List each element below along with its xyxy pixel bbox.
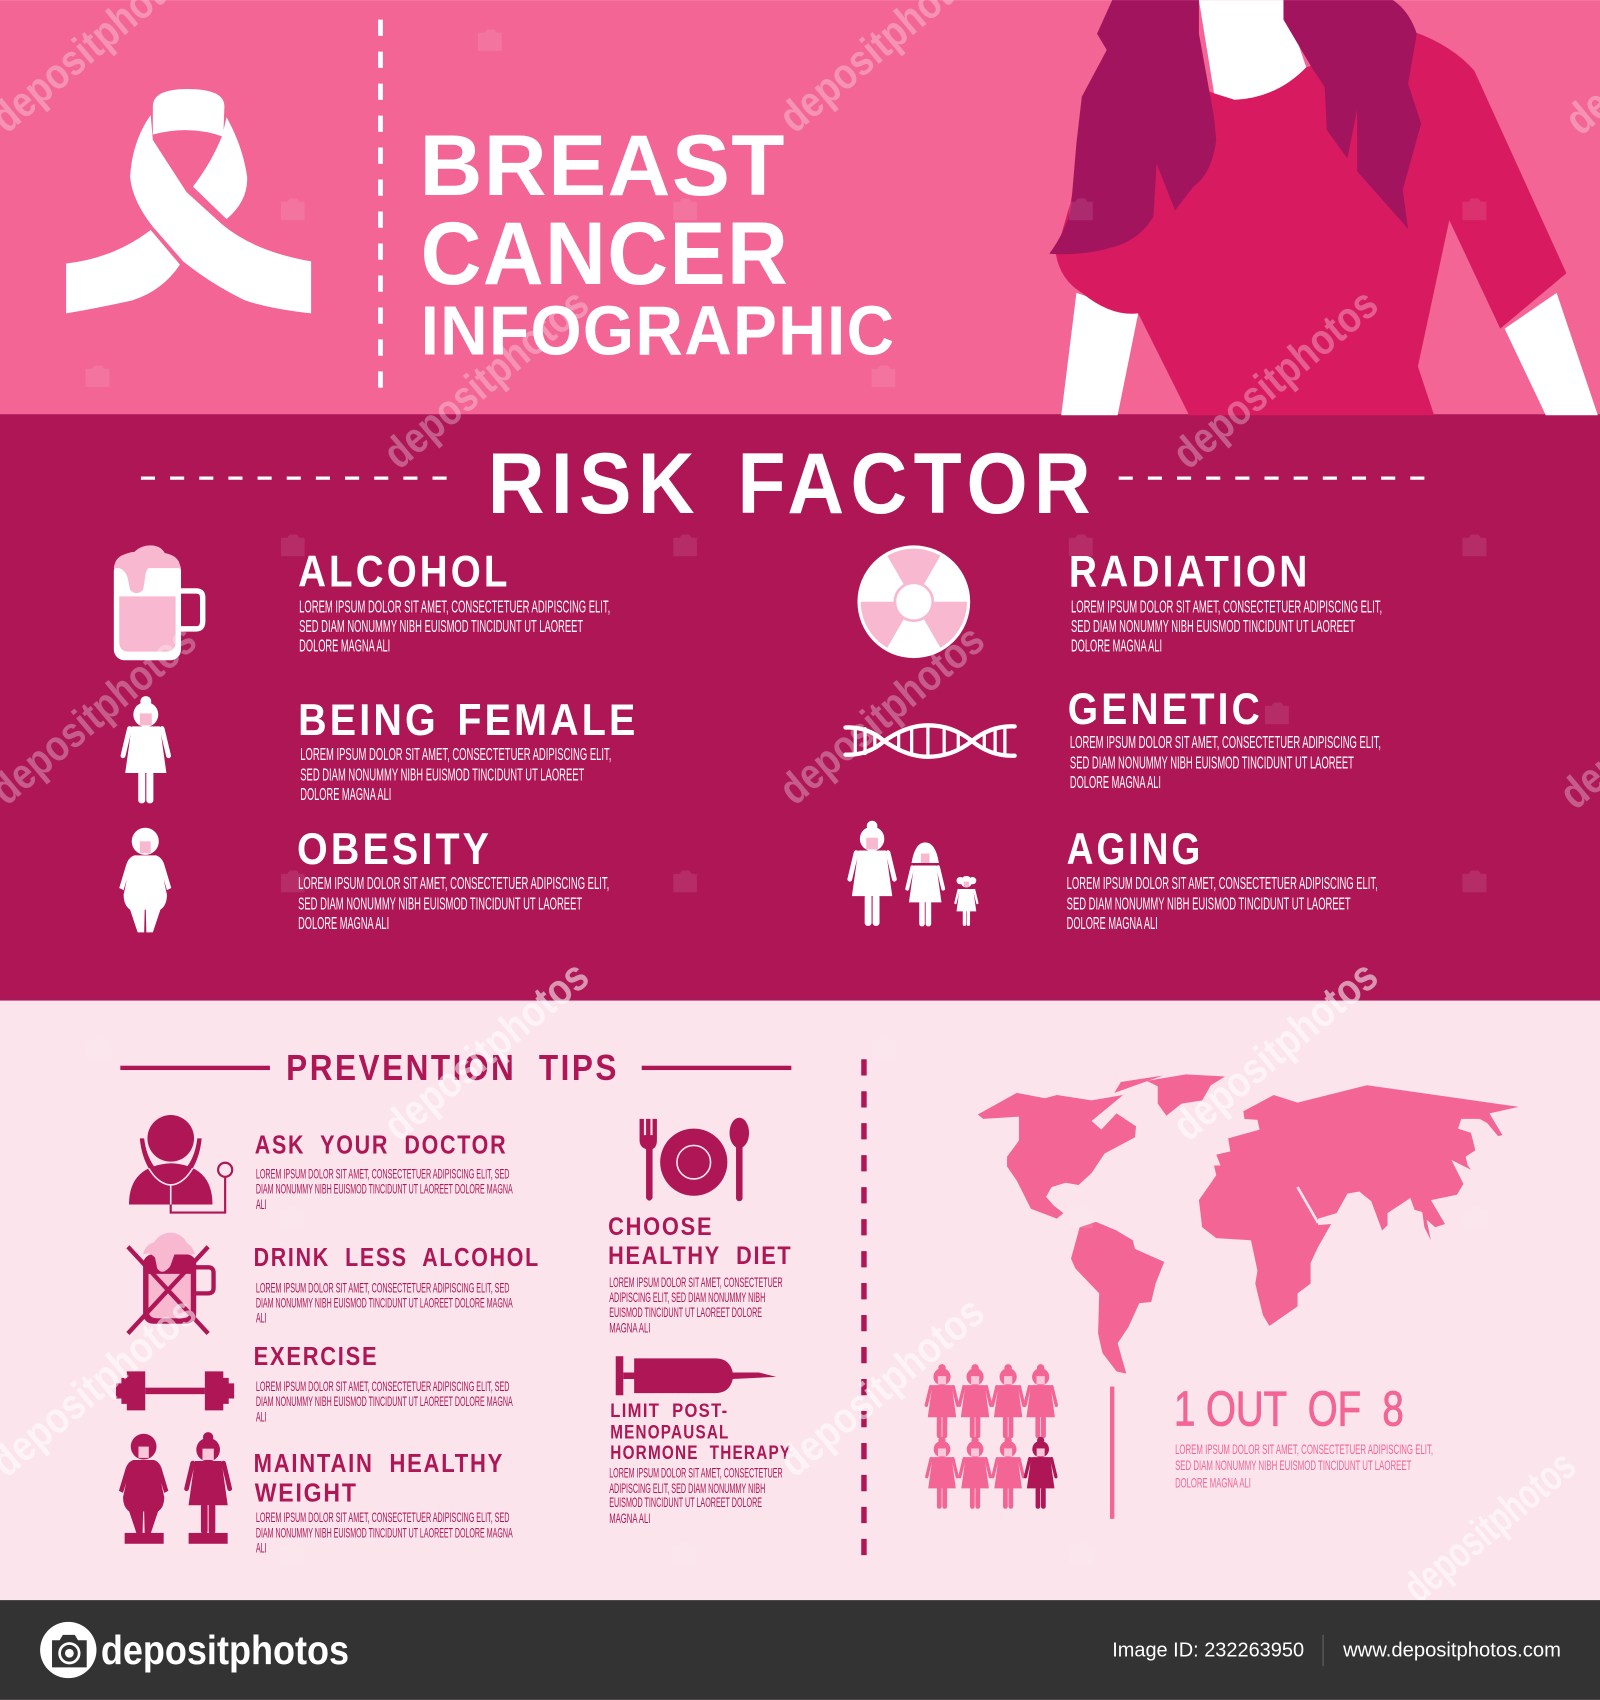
tip: drink less alcohol <box>254 1242 540 1326</box>
watermarks: light band: depositphotos <box>1164 952 1387 1150</box>
watermarks: light band: depositphotos <box>770 1288 994 1486</box>
tip: limit hormone therapy: MENOPAUSAL <box>610 1422 730 1444</box>
risk: alcohol: DOLORE MAGNA ALI <box>299 636 390 656</box>
statistic: 1 out of 8: SED DIAM NONUMMY NIBH EUISMOD TINCIDUNT UT LAOREET <box>1175 1457 1412 1473</box>
pictogram: 1 of 8 women <box>926 1364 1056 1509</box>
tip: ask your doctor: ASK YOUR DOCTOR <box>255 1130 507 1160</box>
divider: header dashed line <box>378 20 383 390</box>
watermarks: depositphotos <box>770 616 994 814</box>
footer logo: depositphotos <box>101 1627 349 1673</box>
footer credits: www.depositphotos.com <box>1342 1639 1561 1662</box>
tip: maintain healthy weight: MAINTAIN HEALTHY <box>254 1448 504 1478</box>
tip: choose healthy diet: ADIPISCING ELIT, SED DIAM NONUMMY NIBH <box>609 1289 765 1305</box>
footer credits: Image ID: 232263950 <box>1112 1639 1304 1662</box>
tip: limit hormone therapy <box>609 1400 791 1526</box>
icon: crossed-out beer mug <box>128 1233 214 1333</box>
risk: aging <box>1067 825 1378 933</box>
panel: risk factor band <box>0 414 1600 1001</box>
risk: obesity: LOREM IPSUM DOLOR SIT AMET, CONSECTETUER ADIPISCING ELIT, <box>298 873 609 893</box>
risk: aging: DOLORE MAGNA ALI <box>1067 913 1158 933</box>
tip: exercise <box>254 1341 513 1424</box>
panel: header band <box>0 0 1600 415</box>
icon: doctor <box>129 1115 232 1213</box>
risk: genetic: GENETIC <box>1068 685 1263 734</box>
icon: dna helix <box>846 725 1015 757</box>
risk: aging: SED DIAM NONUMMY NIBH EUISMOD TINCIDUNT UT LAOREET <box>1067 894 1351 914</box>
tip: limit hormone therapy: MAGNA ALI <box>609 1510 650 1526</box>
risk: obesity: SED DIAM NONUMMY NIBH EUISMOD TINCIDUNT UT LAOREET <box>298 894 582 914</box>
tip: choose healthy diet: CHOOSE <box>608 1213 713 1241</box>
risk: being female: LOREM IPSUM DOLOR SIT AMET, CONSECTETUER ADIPISCING ELIT, <box>300 744 611 764</box>
icon: obese figure <box>119 828 171 932</box>
risk: alcohol: ALCOHOL <box>298 548 511 597</box>
tip: maintain healthy weight: DIAM NONUMMY NIBH EUISMOD TINCIDUNT UT LAOREET DOLORE MAGNA <box>256 1524 513 1540</box>
tip: limit hormone therapy: ADIPISCING ELIT, SED DIAM NONUMMY NIBH <box>609 1480 765 1496</box>
icon: beer mug <box>114 545 203 660</box>
watermarks: depositphotos <box>1164 280 1387 478</box>
title: CANCER <box>421 204 789 303</box>
tip: maintain healthy weight: ALI <box>256 1539 267 1555</box>
risk: radiation <box>1069 548 1382 656</box>
tip: exercise: DIAM NONUMMY NIBH EUISMOD TINCIDUNT UT LAOREET DOLORE MAGNA <box>256 1393 513 1409</box>
tip: choose healthy diet: HEALTHY DIET <box>608 1242 792 1270</box>
tip: maintain healthy weight: WEIGHT <box>255 1477 358 1507</box>
tip: maintain healthy weight <box>254 1448 513 1555</box>
title: INFOGRAPHIC <box>421 292 895 370</box>
footer credits <box>1112 1635 1561 1666</box>
watermarks: light band <box>0 952 1585 1612</box>
tip: ask your doctor: DIAM NONUMMY NIBH EUISMOD TINCIDUNT UT LAOREET DOLORE MAGNA <box>256 1181 513 1197</box>
statistic: 1 out of 8: DOLORE MAGNA ALI <box>1175 1474 1251 1490</box>
risk: aging: AGING <box>1067 825 1203 874</box>
watermarks: camera marks <box>86 29 1486 1564</box>
risk: being female: SED DIAM NONUMMY NIBH EUISMOD TINCIDUNT UT LAOREET <box>300 765 584 785</box>
risk: alcohol: LOREM IPSUM DOLOR SIT AMET, CONSECTETUER ADIPISCING ELIT, <box>299 597 610 617</box>
risk: obesity: DOLORE MAGNA ALI <box>298 913 389 933</box>
statistic: 1 out of 8: 1 OUT OF 8 <box>1174 1383 1404 1437</box>
tip: drink less alcohol: ALI <box>256 1310 267 1326</box>
tip: exercise: LOREM IPSUM DOLOR SIT AMET, CONSECTETUER ADIPISCING ELIT, SED <box>256 1378 509 1394</box>
risk: radiation: SED DIAM NONUMMY NIBH EUISMOD TINCIDUNT UT LAOREET <box>1071 616 1355 636</box>
risk: radiation: DOLORE MAGNA ALI <box>1071 636 1162 656</box>
tip: limit hormone therapy: HORMONE THERAPY <box>610 1442 791 1464</box>
tip: choose healthy diet <box>608 1213 792 1335</box>
heading: prevention tips <box>120 1048 791 1088</box>
footer bar <box>0 1600 1600 1700</box>
tip: ask your doctor <box>255 1130 513 1212</box>
tip: ask your doctor: LOREM IPSUM DOLOR SIT AMET, CONSECTETUER ADIPISCING ELIT, SED <box>256 1165 509 1181</box>
risk: genetic: DOLORE MAGNA ALI <box>1070 772 1161 792</box>
tip: maintain healthy weight: LOREM IPSUM DOLOR SIT AMET, CONSECTETUER ADIPISCING ELIT, SED <box>256 1509 509 1525</box>
watermarks: light band: depositphotos <box>374 952 598 1150</box>
icon: radiation <box>857 545 970 658</box>
tip: choose healthy diet: MAGNA ALI <box>609 1319 650 1335</box>
statistic: 1 out of 8 <box>1174 1383 1433 1490</box>
watermarks <box>0 0 1600 819</box>
risk: obesity <box>297 825 609 933</box>
icon: two women on scales <box>119 1432 230 1544</box>
icon: syringe <box>616 1356 776 1395</box>
illustration: woman <box>1049 0 1598 415</box>
risk: being female: BEING FEMALE <box>298 696 638 745</box>
title <box>420 117 895 370</box>
tip: exercise: EXERCISE <box>254 1341 378 1371</box>
risk: radiation: RADIATION <box>1069 548 1311 597</box>
risk: alcohol: SED DIAM NONUMMY NIBH EUISMOD TINCIDUNT UT LAOREET <box>299 616 583 636</box>
tip: limit hormone therapy: LOREM IPSUM DOLOR SIT AMET, CONSECTETUER <box>609 1465 783 1481</box>
tip: ask your doctor: ALI <box>256 1196 267 1212</box>
world map <box>978 1074 1519 1374</box>
icon: plate and cutlery <box>640 1118 749 1201</box>
tip: exercise: ALI <box>256 1408 267 1424</box>
icon: awareness ribbon <box>66 89 311 313</box>
panel: prevention band <box>0 1001 1600 1600</box>
risk: alcohol <box>298 548 610 656</box>
footer logo <box>40 1622 349 1678</box>
tip: drink less alcohol: LOREM IPSUM DOLOR SIT AMET, CONSECTETUER ADIPISCING ELIT, SED <box>256 1279 509 1295</box>
heading: risk factor: RISK FACTOR <box>488 435 1097 532</box>
risk: genetic: SED DIAM NONUMMY NIBH EUISMOD TINCIDUNT UT LAOREET <box>1070 753 1354 773</box>
icon: female figure <box>123 696 169 803</box>
tip: limit hormone therapy: LIMIT POST- <box>610 1400 728 1422</box>
risk: obesity: OBESITY <box>297 825 492 874</box>
watermarks: depositphotos <box>374 280 598 478</box>
title: BREAST <box>420 117 786 214</box>
tip: drink less alcohol: DRINK LESS ALCOHOL <box>254 1242 540 1272</box>
icon: three generations <box>850 821 977 926</box>
risk: being female: DOLORE MAGNA ALI <box>300 784 391 804</box>
tip: drink less alcohol: DIAM NONUMMY NIBH EUISMOD TINCIDUNT UT LAOREET DOLORE MAGNA <box>256 1294 513 1310</box>
tip: choose healthy diet: LOREM IPSUM DOLOR SIT AMET, CONSECTETUER <box>609 1274 783 1290</box>
divider: statistic line <box>1110 1387 1114 1519</box>
tip: choose healthy diet: EUISMOD TINCIDUNT UT LAOREET DOLORE <box>609 1304 762 1320</box>
divider: prevention dashed line <box>861 1059 866 1556</box>
tip: limit hormone therapy: EUISMOD TINCIDUNT UT LAOREET DOLORE <box>609 1494 762 1510</box>
risk: being female <box>298 696 638 804</box>
heading: prevention tips: PREVENTION TIPS <box>286 1048 619 1088</box>
risk: genetic <box>1068 685 1381 792</box>
icon: dumbbell <box>116 1371 234 1410</box>
